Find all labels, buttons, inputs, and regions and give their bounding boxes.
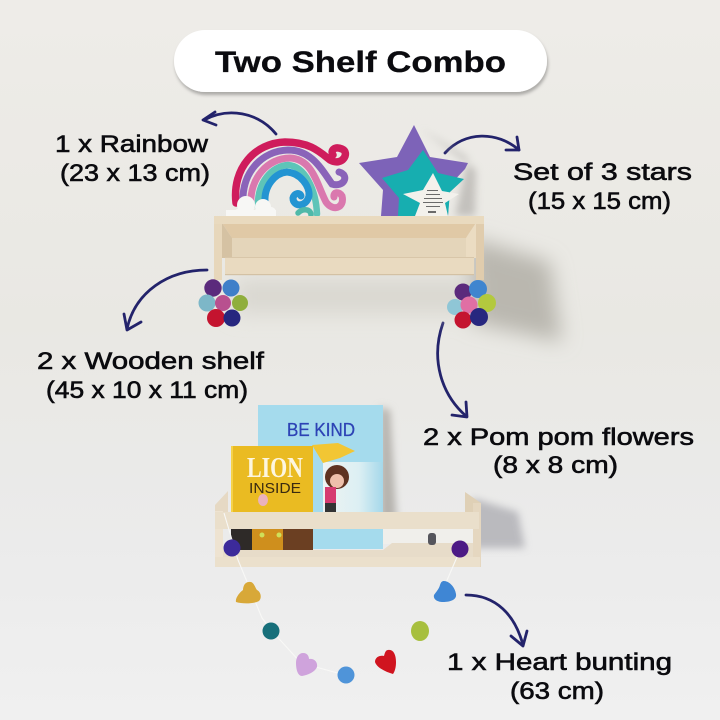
string (224, 513, 460, 675)
label: heart bunting: 1 x Heart bunting (447, 649, 672, 676)
title: Two Shelf Combo (215, 46, 506, 79)
arrow: to wooden shelf (124, 270, 207, 330)
left pom pom flower (198, 279, 248, 327)
lilac heart (296, 653, 317, 676)
purple star (359, 125, 468, 216)
label: heart bunting: (63 cm) (510, 678, 604, 705)
label: wooden shelf: 2 x Wooden shelf (37, 348, 264, 375)
blue heart (434, 581, 456, 602)
left end ball (224, 540, 240, 556)
lower blue part of book (313, 529, 383, 549)
back board (222, 236, 476, 258)
back wall area (383, 529, 473, 544)
lower wooden shelf (215, 446, 481, 567)
arrow: to rainbow (203, 112, 276, 134)
label: pom pom flowers: (8 x 8 cm) (493, 452, 618, 479)
label: pom pom flowers (423, 424, 694, 479)
label: stars (513, 159, 692, 215)
lower shelf shadow (472, 498, 525, 548)
stars (359, 125, 476, 216)
label: wooden shelf: (45 x 10 x 11 cm) (46, 377, 248, 404)
underside of top (222, 223, 476, 238)
book: Be Kind (258, 405, 397, 549)
upper wooden shelf (214, 216, 484, 280)
upper shelf shadow (235, 238, 562, 342)
book: The Lion Inside (231, 446, 313, 550)
arrow: to pom pom flowers (438, 323, 467, 417)
right end ball (452, 540, 468, 558)
blue ball (338, 666, 354, 684)
cloud (226, 196, 276, 217)
label: heart bunting (447, 649, 672, 705)
label: wooden shelf (37, 348, 264, 404)
small figurine (428, 533, 436, 545)
mouse (258, 494, 268, 506)
label: rainbow: (23 x 13 cm) (60, 160, 210, 187)
teal star (382, 150, 464, 216)
label: stars: (15 x 15 cm) (528, 188, 671, 215)
title pill (174, 30, 547, 92)
book: The Lion Inside: LION (247, 453, 303, 484)
label: stars: Set of 3 stars (513, 159, 692, 186)
front rail (225, 257, 474, 275)
white star (403, 173, 459, 216)
shelf floor top (223, 543, 473, 557)
green ball (411, 621, 429, 641)
star text (423, 190, 443, 213)
shelf sides and rails (215, 491, 228, 512)
label: rainbow (55, 131, 210, 187)
arrow: to stars (445, 136, 519, 153)
book: The Lion Inside: INSIDE (249, 480, 301, 497)
red heart (375, 650, 396, 674)
teal ball (262, 622, 280, 640)
inner sides (222, 223, 232, 258)
book title: BE KIND (287, 420, 355, 440)
label: rainbow: 1 x Rainbow (55, 131, 209, 158)
rainbow (236, 142, 345, 215)
top board (214, 216, 484, 224)
right pom pom flower (447, 280, 496, 328)
yellow heart (236, 582, 261, 603)
label: pom pom flowers: 2 x Pom pom flowers (423, 424, 694, 451)
star shadow (420, 128, 476, 216)
heart bunting (224, 513, 468, 684)
side boards (214, 224, 222, 280)
arrow: to heart bunting (466, 595, 527, 646)
